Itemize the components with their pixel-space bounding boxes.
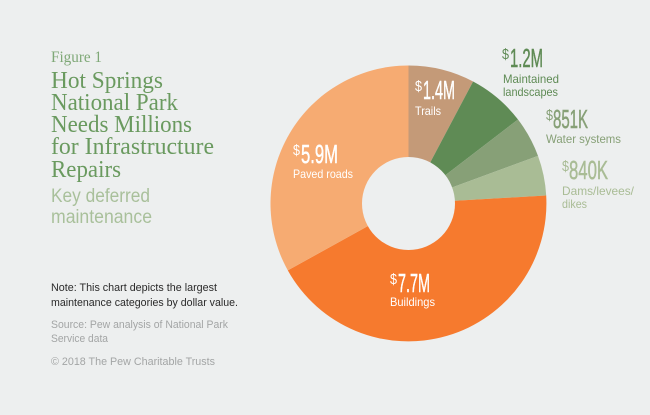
label: paved roads [293, 139, 353, 181]
note [51, 282, 238, 309]
title: Needs Millions [51, 112, 192, 138]
source: Source: Pew analysis of National Park [51, 319, 228, 331]
label: trails: Trails [415, 104, 441, 118]
label: paved roads: $ [293, 142, 301, 159]
title: for Infrastructure [51, 134, 214, 160]
subtitle: maintenance [51, 207, 152, 228]
source [51, 319, 228, 345]
slice: dams, levees, dikes [408, 156, 546, 204]
label: water systems: $ [546, 107, 554, 124]
label: buildings: 7.7M [398, 268, 430, 298]
label: water systems: Water systems [546, 132, 621, 146]
label: trails [415, 75, 455, 118]
label: dams, levees, dikes: Dams/levees/ [562, 184, 635, 198]
title [51, 68, 214, 183]
source: Service data [51, 333, 109, 345]
label: maintained landscapes: 1.2M [510, 43, 543, 73]
title: National Park [51, 90, 178, 116]
note: Note: This chart depicts the largest [51, 282, 217, 294]
label: maintained landscapes: $ [502, 46, 510, 63]
title: Hot Springs [51, 68, 163, 94]
label: maintained landscapes: Maintained [503, 72, 559, 86]
label: buildings: Buildings [390, 295, 435, 309]
copyright: © 2018 The Pew Charitable Trusts [51, 356, 215, 368]
label: paved roads: Paved roads [293, 167, 353, 181]
slice: paved roads [270, 66, 408, 270]
label: buildings [390, 268, 435, 309]
subtitle: Key deferred [51, 186, 150, 207]
label: water systems [546, 104, 621, 146]
donut hole [362, 157, 455, 250]
label: maintained landscapes [502, 43, 559, 99]
label: maintained landscapes: landscapes [503, 85, 558, 99]
label: dams, levees, dikes [562, 155, 635, 211]
label: dams, levees, dikes: dikes [562, 197, 587, 211]
title: Repairs [51, 157, 121, 183]
label: paved roads: 5.9M [301, 139, 338, 169]
label: water systems: 851K [553, 104, 588, 134]
donut chart [270, 65, 546, 341]
note: maintenance categories by dollar value. [51, 297, 238, 309]
label: dams, levees, dikes: $ [562, 158, 570, 175]
slice: buildings [288, 196, 546, 341]
slice: water systems [408, 120, 538, 204]
figure number: Figure 1 [51, 49, 102, 66]
label: dams, levees, dikes: 840K [569, 155, 608, 185]
label: buildings: $ [390, 271, 398, 288]
slice: trails [408, 65, 473, 203]
subtitle [51, 186, 152, 228]
label: trails: $ [415, 78, 423, 95]
heading block [51, 49, 214, 228]
label: trails: 1.4M [423, 75, 455, 105]
slice: maintained landscapes [408, 82, 518, 204]
